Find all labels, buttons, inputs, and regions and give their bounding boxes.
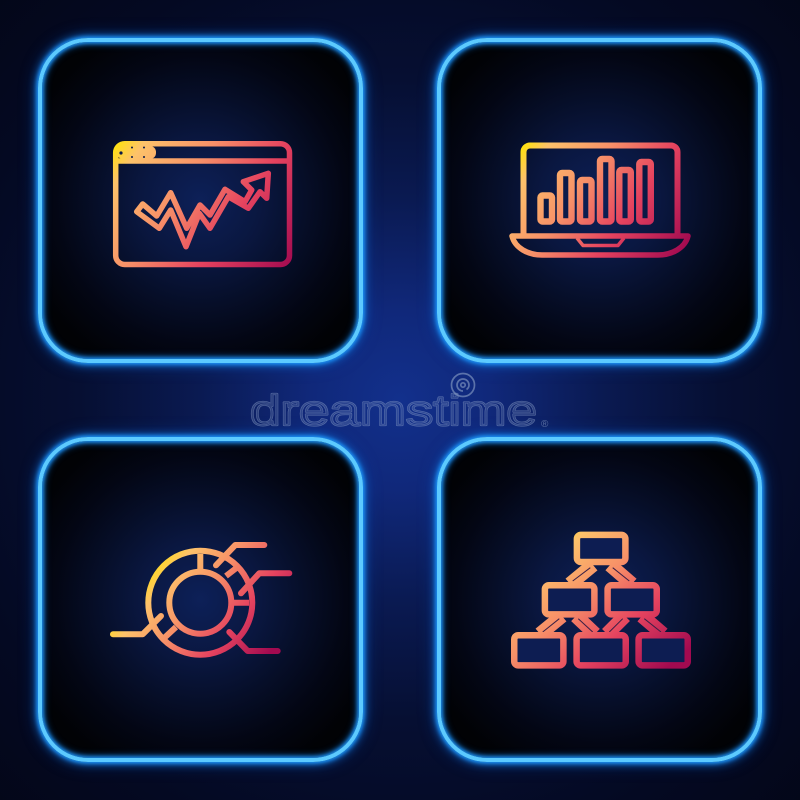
laptop screen: [524, 146, 678, 235]
boxes: [514, 535, 688, 665]
panel: hierarchy pyramid: [437, 437, 762, 762]
watermark spiral logo: [452, 374, 474, 396]
window control dots: [117, 146, 156, 159]
callout lines: [113, 545, 289, 651]
watermark: [250, 372, 549, 432]
icon: browser window with trend arrow: [112, 141, 292, 268]
watermark registered mark: ®: [541, 419, 549, 430]
inner ring: [169, 572, 231, 634]
trackpad notch: [577, 238, 624, 246]
panel: circular diagram: [38, 437, 363, 762]
panel: browser window with rising chart: [38, 38, 363, 363]
ring spokes: [164, 554, 249, 638]
connector inner lines: [543, 568, 661, 632]
bars: [540, 159, 651, 222]
title bar divider: [116, 158, 290, 164]
connectors: [540, 565, 663, 634]
zigzag arrow: [137, 173, 268, 247]
outer ring: [148, 551, 252, 655]
laptop base: [512, 236, 688, 255]
panel: laptop with bar chart: [437, 38, 762, 363]
icon: ring chart with callout lines: [110, 542, 292, 658]
window frame: [116, 144, 290, 264]
icon: pyramid of connected boxes: [511, 532, 691, 669]
icon: laptop bar chart: [509, 142, 691, 258]
